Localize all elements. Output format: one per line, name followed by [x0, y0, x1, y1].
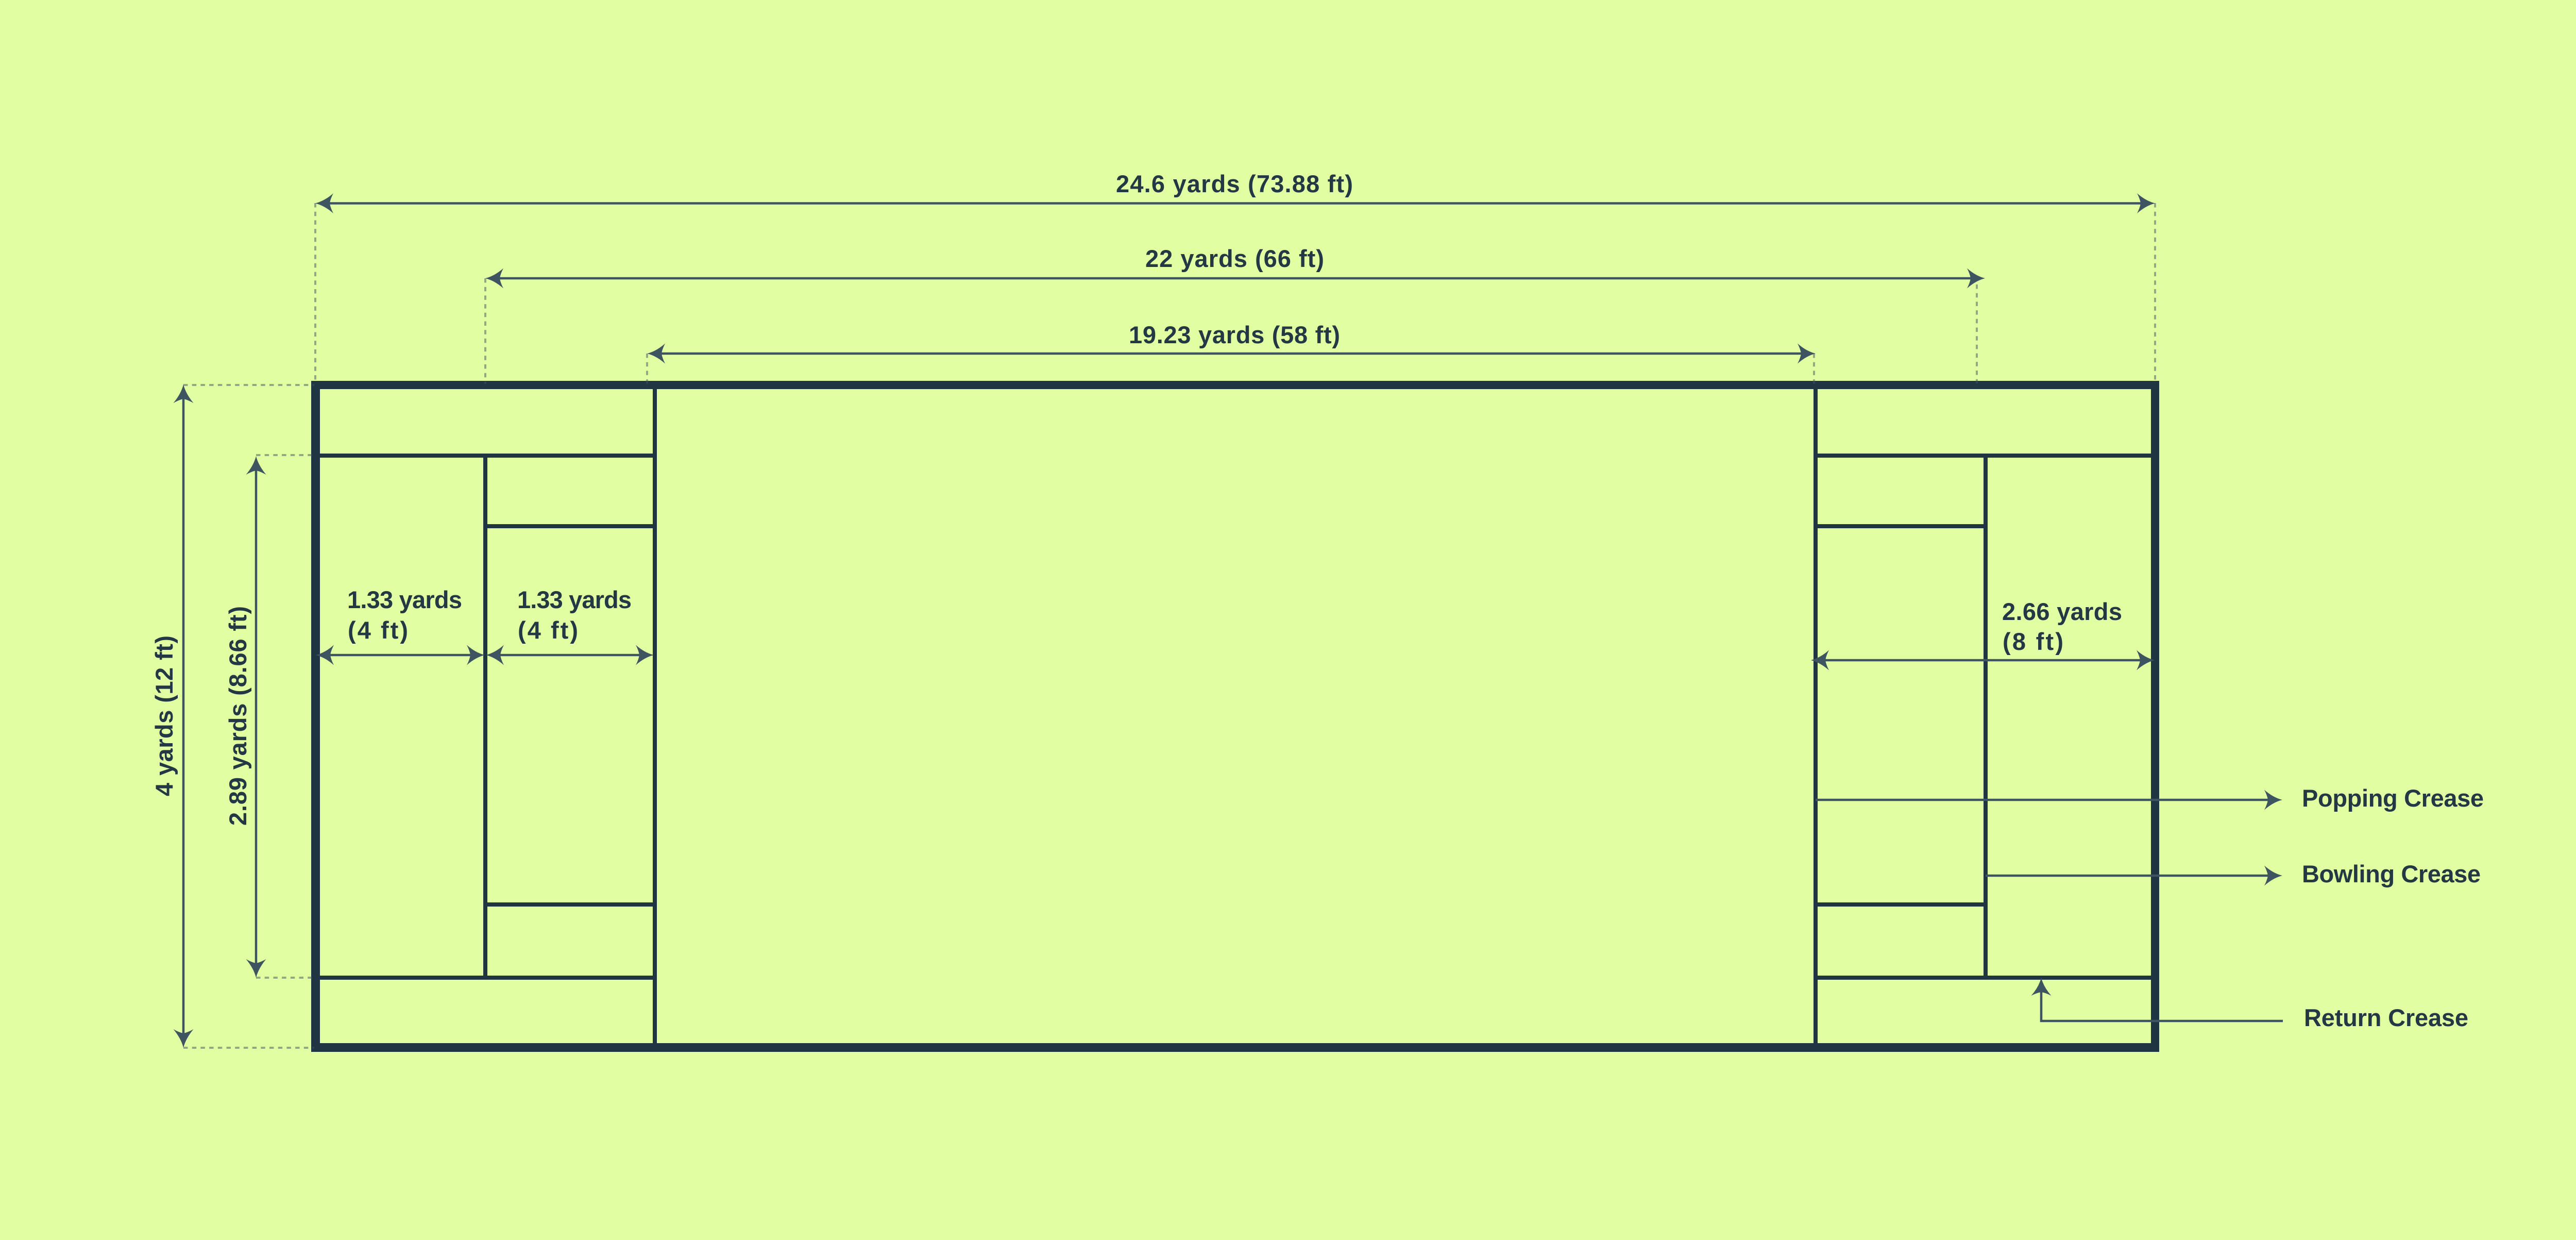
callout arrow: return crease [2031, 978, 2283, 1021]
callout arrow: bowling crease [1986, 866, 2282, 885]
dimension arrow: left 1.33 yards [316, 645, 485, 665]
label: popping crease: Popping Crease [2302, 784, 2484, 812]
label: left 1.33 yards: (4 ft) [348, 616, 408, 644]
label: 2.66 yards: 2.66 yards [2002, 598, 2122, 625]
label: right 1.33 yards [517, 586, 632, 644]
right end inner crease lines [1814, 389, 2151, 1044]
label: return crease: Return Crease [2304, 1004, 2468, 1031]
label: 2.66 yards: (8 ft) [2003, 628, 2063, 655]
dimension arrow: 2.66 yards [1811, 650, 2155, 670]
callout arrow: popping crease [1816, 790, 2282, 810]
outer boundary [311, 381, 2159, 1052]
label: right 1.33 yards: 1.33 yards [517, 586, 632, 613]
label: bowling crease: Bowling Crease [2302, 860, 2481, 887]
dimension arrow: 19.23 yards [647, 343, 1816, 364]
label: 24.6 yards: 24.6 yards (73.88 ft) [1116, 170, 1353, 197]
label: right 1.33 yards: (4 ft) [518, 616, 578, 644]
label: 4 yards: 4 yards (12 ft) [150, 635, 178, 796]
dimension arrow: 2.89 yards [246, 456, 266, 978]
pitch markings [311, 381, 2159, 1052]
label: 19.23 yards: 19.23 yards (58 ft) [1129, 321, 1340, 348]
label: 2.66 yards [2002, 598, 2122, 655]
dimension arrow: 24.6 yards [315, 193, 2155, 213]
label: 2.89 yards: 2.89 yards (8.66 ft) [224, 606, 251, 826]
left end inner crease lines [320, 389, 657, 1044]
label: 22 yards: 22 yards (66 ft) [1145, 245, 1324, 272]
dimension arrow: right 1.33 yards [486, 645, 654, 665]
label: left 1.33 yards: 1.33 yards [347, 586, 462, 613]
label: left 1.33 yards [347, 586, 462, 644]
dimension arrow: 22 yards [485, 268, 1985, 289]
dimension arrow: 4 yards [173, 384, 194, 1048]
dashed extension lines [183, 203, 2155, 1048]
